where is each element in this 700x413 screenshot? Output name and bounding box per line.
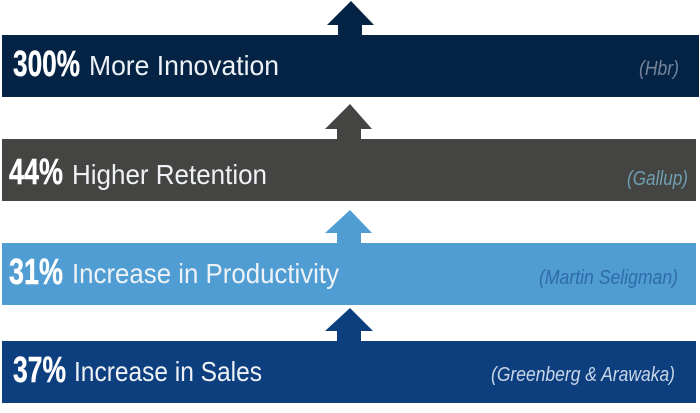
source: Martin Seligman: (Martin Seligman) <box>539 267 678 289</box>
label: more innovation: More Innovation <box>89 50 279 81</box>
source: Gallup: (Gallup) <box>627 168 688 190</box>
arrow bar: charcoal <box>2 104 696 201</box>
label: higher retention: Higher Retention <box>72 159 267 190</box>
stat: 37%: 37% <box>13 349 66 390</box>
stat: 300%: 300% <box>13 43 80 84</box>
arrow bar: light blue <box>2 210 696 305</box>
source: Hbr: (Hbr) <box>639 58 679 80</box>
arrow bar: navy <box>2 1 699 97</box>
label: increase in sales: Increase in Sales <box>74 356 262 387</box>
panel: 31% increase in productivity <box>2 210 696 305</box>
stat: 31%: 31% <box>9 251 63 292</box>
panel: 300% more innovation <box>2 1 699 97</box>
source: Greenberg & Arawaka: (Greenberg & Arawaka) <box>491 364 675 386</box>
panel: 37% increase in sales <box>2 308 696 403</box>
label: increase in productivity: Increase in Productivity <box>72 258 339 289</box>
stat: 44%: 44% <box>9 151 63 192</box>
arrow bar: royal blue <box>2 308 696 403</box>
panel: 44% higher retention <box>2 104 696 201</box>
